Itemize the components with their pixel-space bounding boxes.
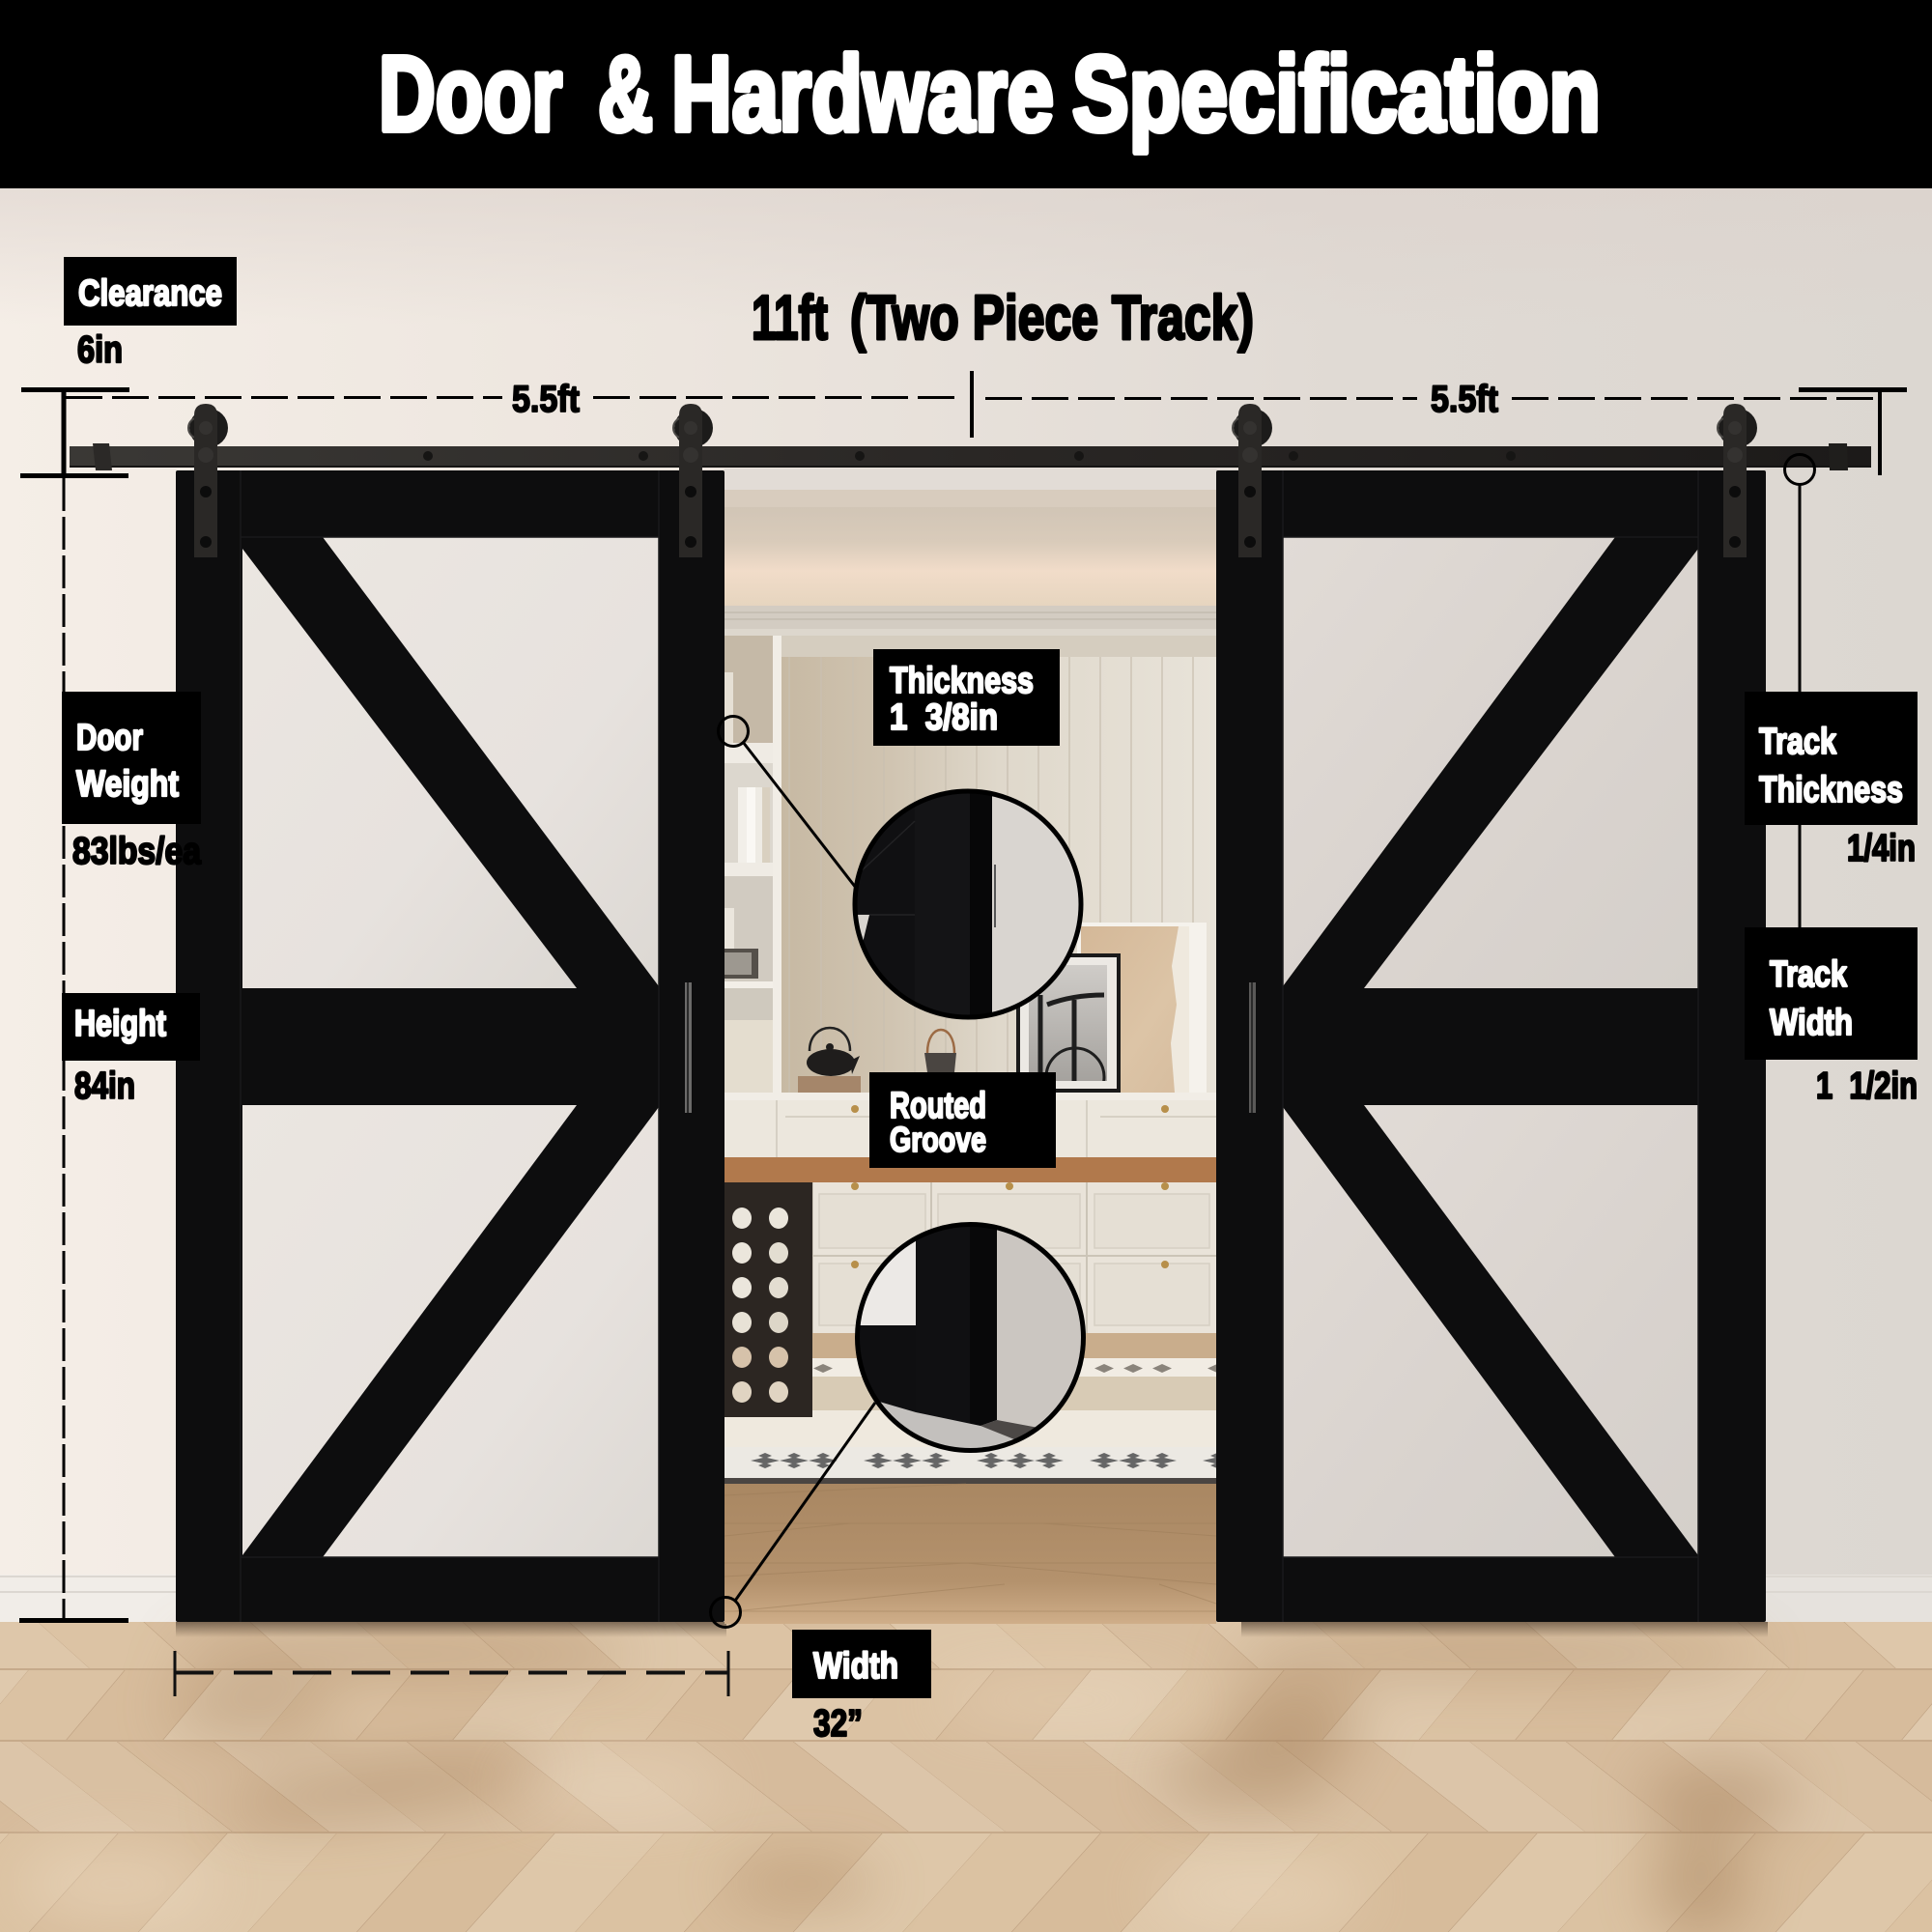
label: 5.5ft left: 5.5ft bbox=[512, 379, 580, 420]
title bar: Hardware bbox=[671, 35, 1054, 154]
lower left panel bbox=[242, 1105, 577, 1555]
wood countertop bbox=[724, 1157, 1216, 1182]
callout: height: Height bbox=[74, 1004, 166, 1044]
bookshelf bbox=[724, 636, 1216, 1100]
callout: clearance: 6in bbox=[77, 329, 123, 371]
lower right panel bbox=[323, 1107, 659, 1557]
title bar bbox=[0, 0, 1932, 188]
lintel and ceiling bbox=[724, 469, 1216, 657]
callout: door weight: 83lbs/ea bbox=[72, 831, 201, 872]
callout: height bbox=[62, 993, 200, 1107]
cast iron teapot bbox=[798, 1028, 861, 1093]
kettle bbox=[924, 1030, 956, 1074]
heading: track length: (Two Piece Track) bbox=[850, 282, 1254, 353]
callout: thickness: Thickness bbox=[890, 661, 1034, 701]
callout: width: Width bbox=[813, 1646, 898, 1687]
wall background bbox=[0, 188, 1932, 1628]
leader: thickness bbox=[719, 717, 856, 888]
herringbone wood floor bbox=[0, 1622, 1932, 1932]
baseboard bbox=[0, 1575, 1932, 1623]
heading: track length: 11ft bbox=[752, 282, 828, 353]
title bar: Door bbox=[379, 35, 562, 154]
hanger roller 2 bbox=[673, 404, 713, 557]
framed bicycle photo bbox=[1016, 953, 1121, 1106]
callout: door weight bbox=[62, 692, 201, 872]
callout: thickness bbox=[873, 649, 1060, 746]
lower left panel bbox=[1283, 1107, 1615, 1557]
title bar: & bbox=[598, 35, 653, 154]
magnifier: door thickness detail bbox=[850, 787, 1087, 1024]
perforated black stand bbox=[724, 1182, 812, 1417]
callout: routed groove: Routed bbox=[890, 1086, 986, 1126]
upper left panel bbox=[1283, 537, 1615, 986]
foreground floor bbox=[724, 1484, 1216, 1624]
callout: track thickness: 1/4in bbox=[1847, 828, 1916, 869]
clearance and height dimension marks bbox=[19, 390, 129, 1621]
leader: routed groove bbox=[711, 1403, 875, 1627]
beadboard wall bbox=[781, 657, 1216, 1101]
callout: clearance: Clearance bbox=[78, 273, 222, 314]
callout: routed groove bbox=[869, 1072, 1056, 1168]
sliding track rail bbox=[70, 443, 1871, 470]
callout: track width bbox=[1745, 927, 1918, 1107]
callout: track width: Width bbox=[1770, 1003, 1853, 1043]
hanger roller 4 bbox=[1718, 404, 1757, 557]
callout: track width: Track bbox=[1770, 954, 1848, 995]
hanger roller 3 bbox=[1233, 404, 1272, 557]
room scene through the opening bbox=[724, 469, 1216, 1624]
right barn door bbox=[1216, 470, 1766, 1622]
back floor and rug bbox=[724, 1333, 1216, 1484]
left barn door bbox=[176, 470, 724, 1622]
magnifier: routed groove detail bbox=[850, 1217, 1092, 1461]
door handle bbox=[685, 982, 692, 1113]
upper cabinets bbox=[776, 1100, 1216, 1157]
upper right panel bbox=[1364, 549, 1698, 988]
callout: track thickness bbox=[1745, 692, 1918, 869]
callout: routed groove: Groove bbox=[890, 1120, 986, 1159]
label: 5.5ft right: 5.5ft bbox=[1431, 379, 1498, 420]
callout: height: 84in bbox=[74, 1065, 135, 1107]
large watercolor art bbox=[1077, 923, 1207, 1093]
heading: track length bbox=[752, 282, 1254, 353]
callout: door weight: Door bbox=[76, 718, 143, 758]
upper left glass panel bbox=[242, 549, 577, 988]
lower cabinets bbox=[812, 1182, 1216, 1333]
track callout leader line bbox=[1785, 454, 1814, 927]
callout: width bbox=[792, 1630, 931, 1745]
track length dimension lines bbox=[66, 371, 1880, 438]
hanger roller 1 bbox=[188, 404, 228, 557]
callout: width: 32” bbox=[813, 1703, 863, 1745]
upper right panel bbox=[323, 537, 659, 986]
callout: thickness: 1 3/8in bbox=[890, 697, 998, 738]
callout: track thickness: Track bbox=[1759, 722, 1837, 762]
callout: door weight: Weight bbox=[76, 764, 179, 805]
callout: clearance bbox=[64, 257, 237, 371]
lower right panel bbox=[1364, 1105, 1698, 1555]
right clearance dimension marks bbox=[1799, 389, 1907, 475]
door width dimension bbox=[175, 1651, 728, 1696]
door handle bbox=[1249, 982, 1256, 1113]
title bar: Specification bbox=[1072, 35, 1601, 154]
